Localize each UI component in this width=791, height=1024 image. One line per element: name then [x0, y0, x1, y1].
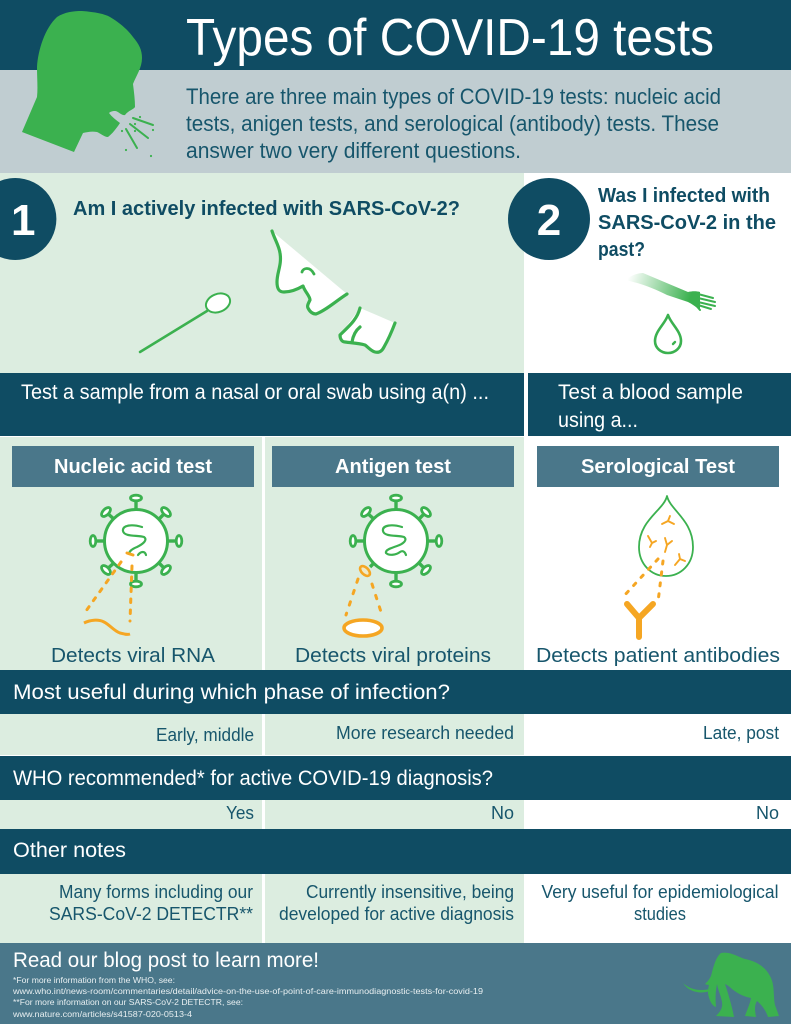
question 2 heading: past?: [598, 239, 645, 261]
intro text: [186, 84, 721, 163]
icon: coughing head: [22, 11, 154, 157]
row: WHO answers: No: [491, 803, 514, 823]
row heading: WHO recommended: [0, 756, 791, 800]
question 2 heading: SARS-CoV-2 in the: [598, 212, 776, 234]
banner: left sample instruction: Test a sample from a nasal or oral swab using a(n) ...: [21, 381, 489, 404]
row: notes answers: Very useful for epidemiological: [542, 882, 778, 902]
column: antigen test: [265, 437, 524, 670]
row: WHO answers: [0, 800, 779, 829]
row: notes answers: studies: [634, 904, 686, 924]
footnotes: [12, 975, 483, 1019]
result label: Detects patient antibodies: [536, 644, 780, 667]
column heading: Nucleic acid test: [54, 456, 212, 478]
icon: nose and mouth profile: [272, 231, 395, 352]
row: notes answers: [0, 874, 778, 943]
column: serological test: [536, 446, 780, 667]
column heading: [12, 446, 254, 487]
row: phase answers: Late, post: [703, 723, 779, 743]
intro panel: [0, 70, 791, 173]
column heading: [537, 446, 779, 487]
footer: [0, 943, 791, 1024]
row heading: other notes: Other notes: [13, 839, 126, 862]
column heading: Antigen test: [335, 456, 451, 478]
column: nucleic acid test: [0, 437, 262, 670]
banner: right sample instruction: [528, 373, 791, 436]
column heading: Serological Test: [581, 456, 735, 478]
row: phase answers: [0, 714, 779, 755]
question 2 heading: Was I infected with: [598, 185, 770, 207]
icon: mammoth: [683, 953, 779, 1017]
number badge 1: 1: [11, 196, 35, 245]
row: notes answers: Many forms including our: [59, 882, 253, 902]
row: phase answers: More research needed: [336, 723, 514, 743]
banner: right sample instruction: Test a blood sample: [558, 381, 743, 404]
title: Types of COVID-19 tests: [186, 9, 714, 67]
row: notes answers: developed for active diagnosis: [279, 904, 514, 924]
intro text: There are three main types of COVID-19 tests: nucleic acid: [186, 84, 721, 109]
result label: Detects viral RNA: [51, 644, 215, 667]
column heading: [272, 446, 514, 487]
banner: right sample instruction: using a...: [558, 409, 638, 432]
row: notes answers: Currently insensitive, being: [306, 882, 514, 902]
row heading: phase: Most useful during which phase of infection?: [13, 681, 450, 704]
icon: blood drop with antibodies: [623, 496, 693, 637]
number badge 2: [508, 178, 590, 260]
icon: blood drop: [655, 315, 681, 353]
question 1 heading: Am I actively infected with SARS-CoV-2?: [73, 198, 460, 220]
footnotes: www.nature.com/articles/s41587-020-0513-4: [12, 1009, 192, 1019]
footnotes: **For more information on our SARS-CoV-2 DETECTR, see:: [13, 997, 243, 1007]
footnotes: www.who.int/news-room/commentaries/detail/advice-on-the-use-of-point-of-care-immunodiagnostic-tests-for-covid-19: [12, 986, 483, 996]
question 2 heading: [598, 185, 776, 261]
row heading: other notes: [0, 829, 791, 874]
header band: title: [0, 0, 791, 70]
footer heading: Read our blog post to learn more!: [13, 949, 319, 972]
number badge 2: 2: [537, 196, 561, 245]
row: WHO answers: No: [756, 803, 779, 823]
intro text: answer two very different questions.: [186, 138, 521, 163]
icon: arm with fingers: [625, 273, 715, 310]
row: notes answers: SARS-CoV-2 DETECTR**: [49, 904, 253, 924]
banner: left sample instruction: [0, 373, 524, 436]
panel: question 1: [0, 173, 524, 373]
icon: swab: [140, 290, 233, 352]
row heading: phase: [0, 670, 791, 714]
intro text: tests, anigen tests, and serological (antibody) tests. These: [186, 111, 719, 136]
icon: virus with RNA probe: [84, 495, 182, 634]
number badge 1: [0, 178, 56, 260]
row: WHO answers: Yes: [226, 803, 254, 823]
icon: virus with protein probe: [344, 495, 442, 636]
footnotes: *For more information from the WHO, see:: [13, 975, 175, 985]
row heading: WHO recommended: WHO recommended* for active COVID-19 diagnosis?: [13, 767, 493, 790]
row: phase answers: Early, middle: [156, 725, 254, 745]
result label: Detects viral proteins: [295, 644, 491, 667]
